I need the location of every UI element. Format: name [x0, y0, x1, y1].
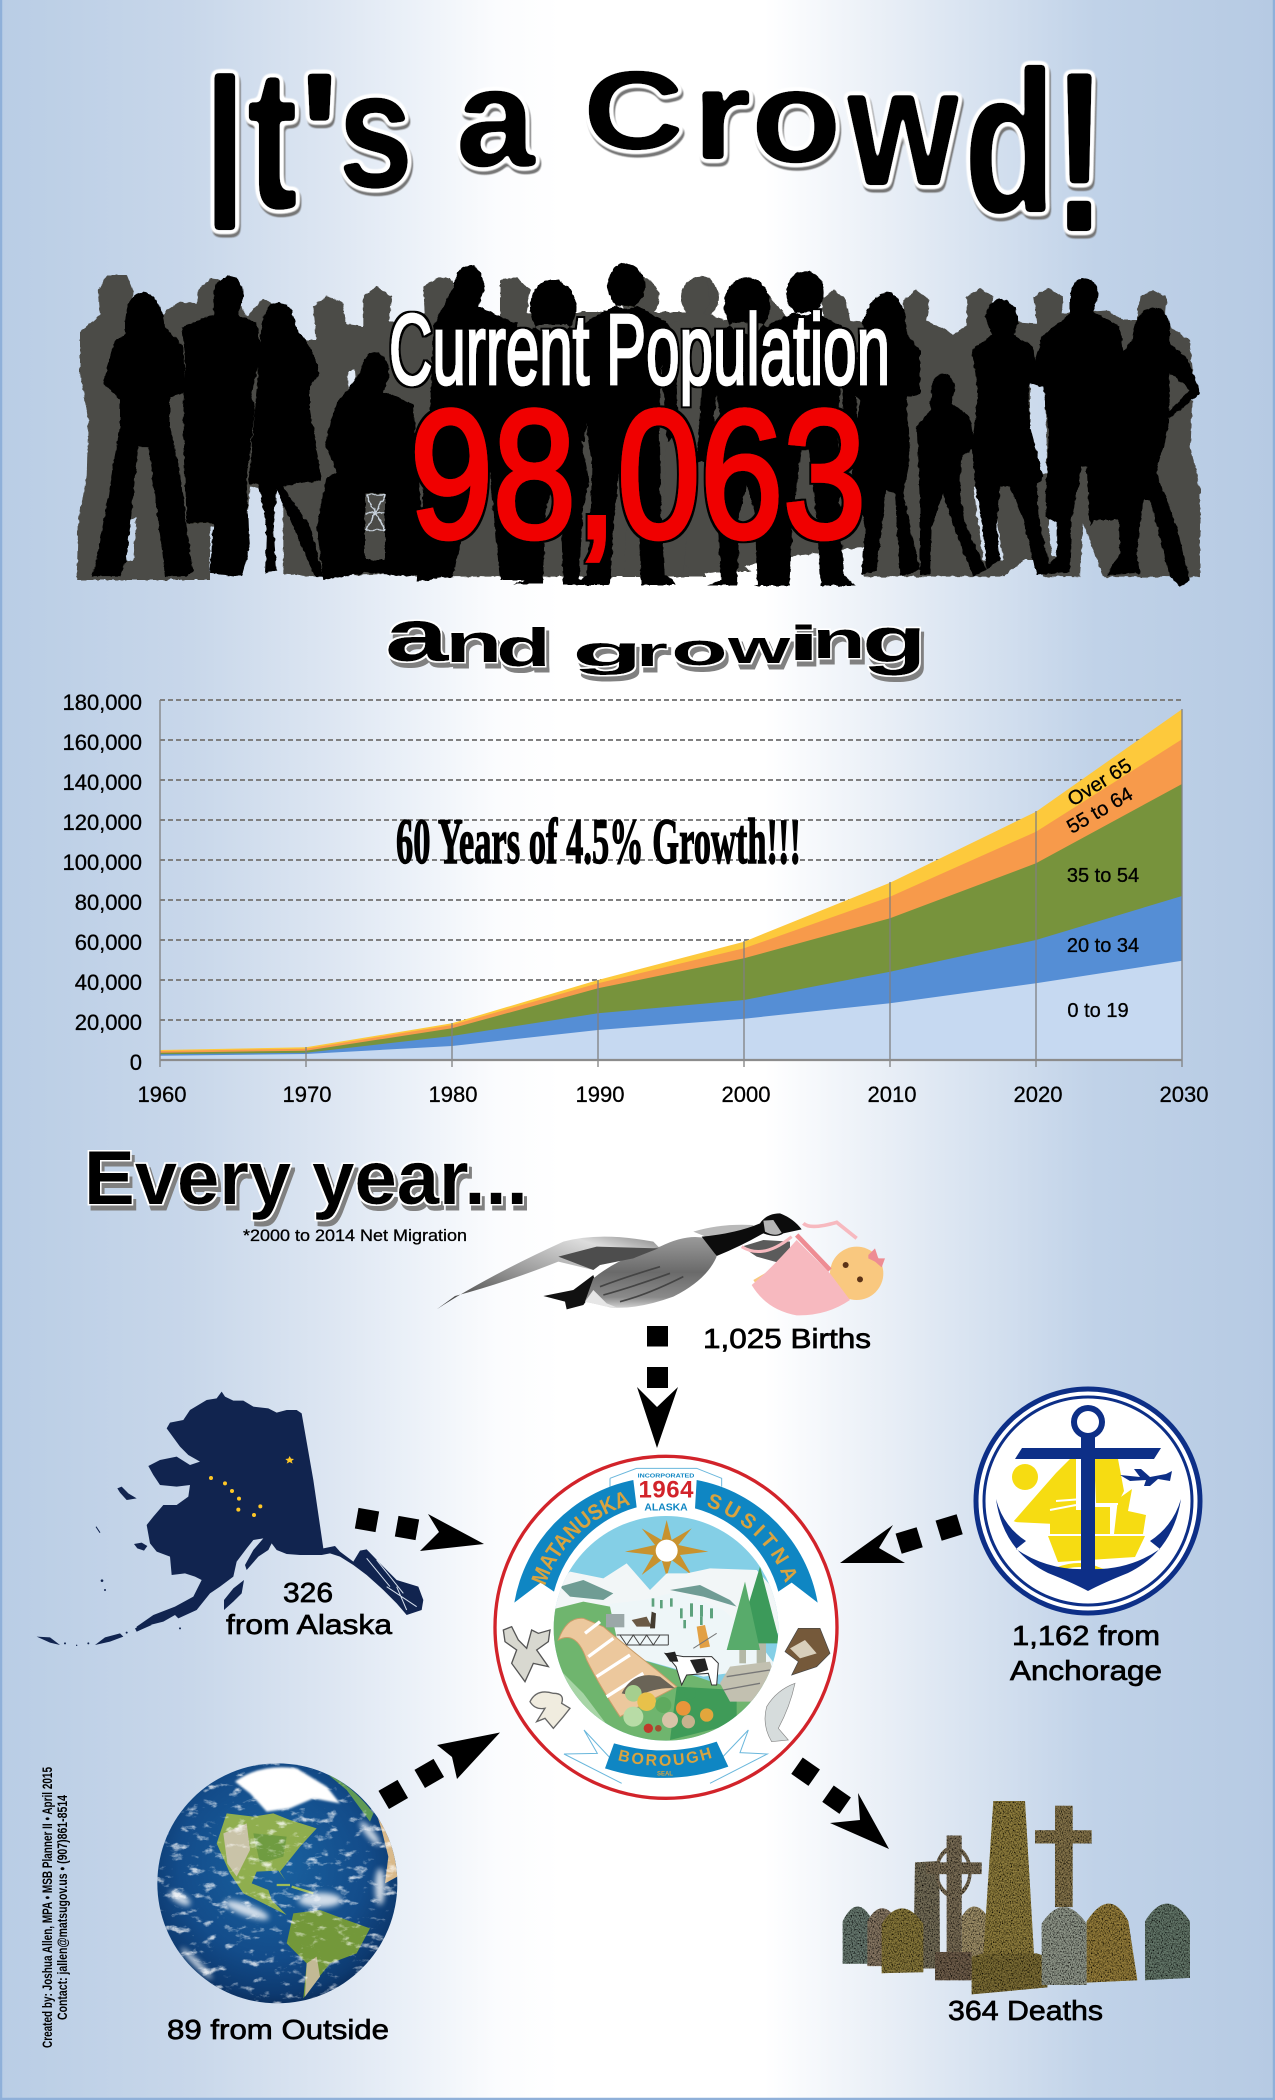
series labels: 20 to 34: [1067, 935, 1139, 957]
and growing heading: n: [445, 613, 502, 674]
and growing heading: r: [636, 628, 668, 675]
x axis labels: 2000: [722, 1082, 770, 1107]
alaska label: [226, 1577, 392, 1640]
title: a: [456, 39, 537, 196]
area: 55 to 64: [160, 739, 1182, 1060]
seal scene: [550, 1513, 783, 1747]
seal ram: [530, 1692, 570, 1728]
x axis labels: 2020: [1014, 1082, 1062, 1107]
title: !: [1051, 24, 1108, 280]
title: r: [692, 43, 752, 186]
seal ribbon right: [695, 1480, 818, 1603]
and growing heading: w: [727, 621, 791, 673]
and growing heading: o: [671, 625, 728, 675]
title: w: [846, 32, 959, 222]
arrow: births to borough: [637, 1326, 678, 1448]
crowd silhouette: [77, 263, 1200, 587]
population number: 98,063: [410, 372, 866, 576]
arrow: borough to deaths: [791, 1757, 889, 1849]
and growing heading: d: [496, 617, 551, 678]
y axis labels: 60,000: [75, 930, 142, 955]
seal ribbon text left: MATANUSKA: [531, 1492, 630, 1585]
title: t: [247, 27, 298, 251]
and growing heading: a: [385, 595, 450, 677]
y axis labels: 80,000: [75, 890, 142, 915]
area: 20 to 34: [160, 896, 1182, 1060]
seal lower ribbon: BOROUGH: [618, 1747, 712, 1766]
y axis labels: 40,000: [75, 970, 142, 995]
seal incorporated: INCORPORATED: [638, 1473, 694, 1479]
title: ': [298, 33, 341, 244]
y axis labels: [62, 690, 142, 1075]
series labels: Over 65: [1064, 755, 1136, 811]
anchorage label: 1,162 from: [1012, 1620, 1160, 1651]
seal bear: [785, 1628, 830, 1675]
y axis labels: 160,000: [62, 730, 142, 755]
seal lower ribbon: SEAL: [657, 1772, 673, 1778]
x axis labels: 2010: [868, 1082, 916, 1107]
credits: Created by: Joshua Allen, MPA • MSB Planner II • April 2015: [39, 1767, 55, 2048]
x axis labels: 2030: [1160, 1082, 1208, 1107]
y axis labels: 180,000: [62, 690, 142, 715]
chart headline: 60 Years of 4.5% Growth!!!: [396, 806, 801, 878]
alaska label: 326: [283, 1577, 333, 1608]
seal moose: [503, 1627, 550, 1682]
y axis labels: 140,000: [62, 770, 142, 795]
x axis labels: [138, 1082, 1208, 1107]
borough seal: [493, 1454, 839, 1800]
arrow: alaska to borough: [355, 1508, 484, 1551]
population growth area chart: [62, 690, 1208, 1107]
y axis labels: 0: [130, 1050, 142, 1075]
credits: Contact: jallen@matsugov.us • (907)861-8514: [54, 1795, 70, 2020]
deaths label: 364 Deaths: [948, 1995, 1103, 2026]
ship: [1012, 1457, 1146, 1572]
anchor: [996, 1405, 1181, 1591]
anchorage label: Anchorage: [1010, 1655, 1162, 1686]
every year heading: Every year...: [84, 1136, 528, 1221]
plane: [1120, 1469, 1172, 1486]
icon: earth globe: [153, 1760, 403, 2010]
icon: goose: [437, 1213, 802, 1309]
x axis labels: 1970: [283, 1082, 331, 1107]
title: [205, 24, 1108, 280]
goose carrying baby: [437, 1213, 885, 1315]
y axis labels: 120,000: [62, 810, 142, 835]
seal ribbon left: [514, 1480, 637, 1603]
and growing heading: [385, 595, 927, 678]
seal salmon: [765, 1683, 795, 1742]
icon: anchorage logo: [976, 1389, 1200, 1613]
current population label: Current Population: [389, 294, 890, 406]
seal alaska: ALASKA: [644, 1502, 688, 1513]
series labels: 35 to 54: [1067, 865, 1139, 887]
title: C: [583, 48, 685, 173]
series labels: [1063, 755, 1139, 1022]
seal lower ribbon: [564, 1730, 769, 1784]
title: I: [205, 25, 245, 279]
and growing heading: i: [787, 616, 820, 671]
seal ribbon text right: SUSITNA: [708, 1494, 796, 1583]
title: s: [338, 38, 413, 223]
arrow: anchorage to borough: [840, 1514, 963, 1563]
seal banner outlines: [610, 1468, 722, 1487]
title: d: [964, 28, 1056, 255]
area: over 65: [160, 709, 1182, 1060]
icon: baby in bundle: [742, 1222, 885, 1315]
credits: [39, 1767, 70, 2048]
and growing heading: g: [862, 604, 927, 676]
x axis labels: 1960: [138, 1082, 186, 1107]
icon: gravestones: [843, 1801, 1190, 1994]
seal year: 1964: [638, 1476, 694, 1503]
arrow: outside to borough: [378, 1732, 500, 1809]
series labels: 55 to 64: [1063, 783, 1137, 838]
x axis labels: 1980: [429, 1082, 477, 1107]
area: 35 to 54: [160, 784, 1182, 1060]
and growing heading: g: [572, 627, 643, 675]
y axis labels: 100,000: [62, 850, 142, 875]
icon: alaska map: [37, 1392, 423, 1646]
x axis labels: 1990: [576, 1082, 624, 1107]
alaska label: from Alaska: [226, 1609, 392, 1640]
anchorage label: [1010, 1620, 1162, 1686]
title: o: [751, 42, 841, 190]
outside label: 89 from Outside: [167, 2014, 389, 2045]
migration footnote: *2000 to 2014 Net Migration: [243, 1226, 467, 1245]
births label: 1,025 Births: [703, 1323, 871, 1354]
area: 0 to 19: [160, 961, 1182, 1060]
series labels: 0 to 19: [1067, 1000, 1129, 1022]
y axis labels: 20,000: [75, 1010, 142, 1035]
and growing heading: n: [812, 611, 866, 670]
